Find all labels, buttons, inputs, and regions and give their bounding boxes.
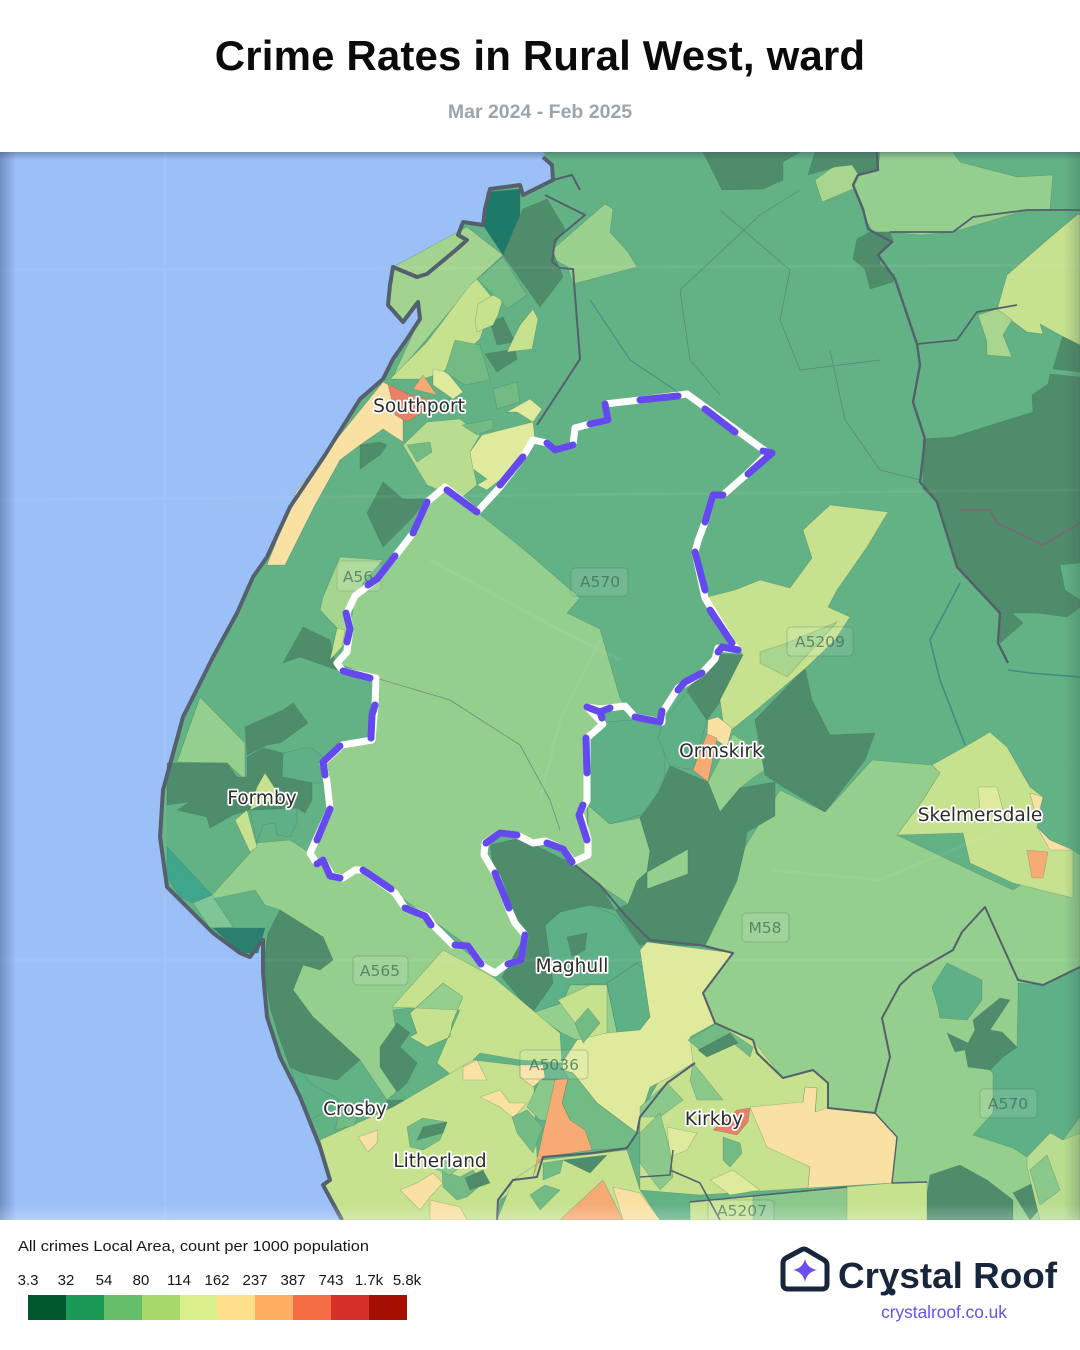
road label: A5207	[708, 1200, 774, 1220]
town labels	[227, 396, 1042, 1172]
road label: A5036: A5036	[529, 1056, 579, 1074]
legend values: 1.7k	[355, 1272, 384, 1289]
town label: Litherland: Litherland	[393, 1151, 487, 1172]
road label: A565: A565	[360, 962, 400, 980]
legend values: 114	[167, 1272, 191, 1289]
road label: A570: A570	[580, 573, 620, 591]
choropleth regions	[167, 152, 1080, 1220]
subtitle: date range: Mar 2024 - Feb 2025	[448, 101, 632, 123]
road labels	[337, 561, 1037, 1229]
land base	[160, 152, 1080, 1220]
road label: A565	[353, 956, 408, 985]
ward boundary	[310, 394, 772, 973]
county boundaries and rivers	[376, 152, 1080, 1220]
wordmark: Crystal Roof	[838, 1255, 1058, 1296]
legend values: 32	[58, 1272, 74, 1289]
road label: A570 south	[980, 1089, 1037, 1118]
road label: A56	[337, 561, 381, 591]
road label: A5036	[520, 1050, 588, 1079]
website: crystalroof.co.uk	[881, 1302, 1007, 1322]
legend title: All crimes Local Area, count per 1000 population	[18, 1238, 369, 1255]
town label: Skelmersdale: Skelmersdale	[918, 805, 1042, 826]
road label: A5207: A5207	[717, 1202, 767, 1220]
map edge shading	[0, 152, 1080, 1220]
road label: A56: A56	[343, 568, 373, 586]
light green regions	[177, 152, 1080, 1220]
legend values	[18, 1272, 422, 1289]
road label: M58: M58	[748, 919, 782, 937]
legend values: 5.8k	[393, 1272, 422, 1289]
teal and mid green patches	[167, 847, 212, 903]
orange and red hot spots	[413, 375, 1048, 1220]
coastline	[160, 157, 553, 1220]
town label: Formby: Formby	[227, 788, 297, 809]
logo: Crystal Roof	[783, 1249, 1058, 1322]
icon: house with star	[783, 1249, 827, 1289]
road label: A5209: A5209	[795, 633, 845, 651]
road label: M58	[742, 913, 789, 942]
legend values: 162	[204, 1272, 230, 1289]
road label: A570	[571, 568, 628, 596]
legend values: 743	[318, 1272, 344, 1289]
cream and yellow regions	[433, 369, 1003, 1195]
legend	[18, 1238, 422, 1320]
legend values: 80	[133, 1272, 149, 1289]
title: Crime Rates in Rural West, ward	[215, 32, 865, 79]
dark green regions	[167, 152, 1080, 1220]
legend values: 3.3	[18, 1272, 38, 1289]
town label: Ormskirk: Ormskirk	[679, 741, 763, 762]
road label: A5209	[787, 627, 853, 656]
legend values: 237	[242, 1272, 268, 1289]
legend colour scale	[28, 1295, 407, 1320]
town label: Southport: Southport	[373, 396, 465, 417]
green city blocks	[335, 257, 753, 1210]
legend values: 54	[96, 1272, 112, 1289]
road label: A570 south: A570	[988, 1095, 1028, 1113]
town label: Kirkby: Kirkby	[685, 1109, 743, 1130]
town label: Crosby: Crosby	[323, 1099, 387, 1120]
sea	[0, 152, 551, 1220]
legend values: 387	[280, 1272, 306, 1289]
town label: Maghull: Maghull	[536, 956, 608, 977]
pale green regions	[235, 214, 1080, 1220]
